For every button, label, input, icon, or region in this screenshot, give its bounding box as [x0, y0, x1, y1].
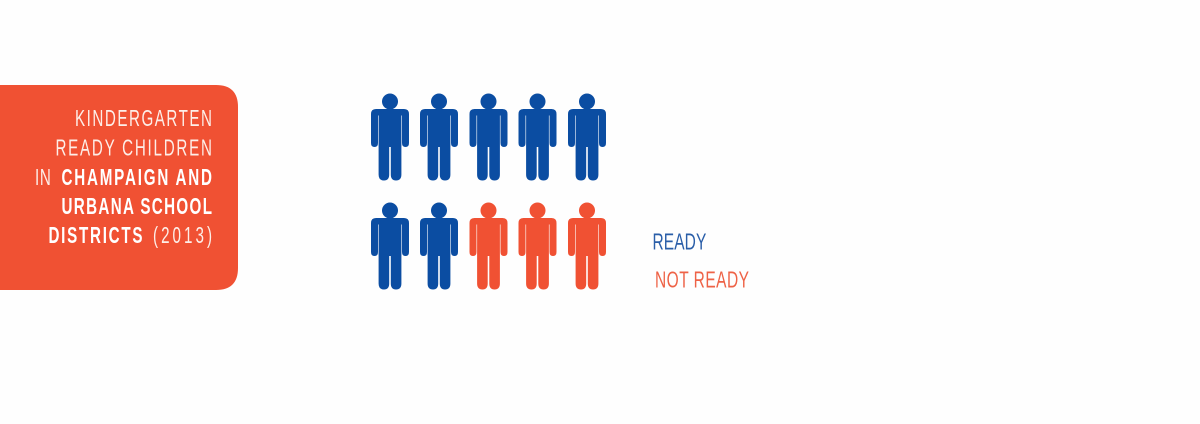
icon: ready child 5: [568, 94, 606, 180]
icon: ready child 2: [420, 94, 458, 180]
heading line: ready children: READY CHILDREN: [56, 135, 212, 161]
heading line: in: IN: [35, 165, 51, 191]
icon: ready child 4: [518, 94, 556, 180]
icon: ready child 1: [371, 94, 409, 180]
panel: title: [0, 85, 238, 290]
icon: not ready child 2: [518, 202, 556, 290]
icon: not ready child 3: [568, 202, 606, 290]
legend label: ready: READY: [652, 229, 706, 255]
icon: not ready child 1: [470, 202, 508, 290]
pictogram: ten children, seven ready and three not ready: [371, 94, 606, 290]
heading line: kindergarten: KINDERGARTEN: [75, 106, 212, 132]
heading line: districts: DISTRICTS: [48, 223, 142, 249]
heading line: urbana school: URBANA SCHOOL: [62, 194, 212, 220]
legend label: not ready: NOT READY: [655, 267, 749, 293]
icon: ready child 7: [420, 202, 458, 290]
icon: ready child 3: [470, 94, 508, 180]
icon: ready child 6: [371, 202, 409, 290]
heading line: champaign and: CHAMPAIGN AND: [62, 165, 212, 191]
heading line: year: (2013): [153, 223, 212, 249]
